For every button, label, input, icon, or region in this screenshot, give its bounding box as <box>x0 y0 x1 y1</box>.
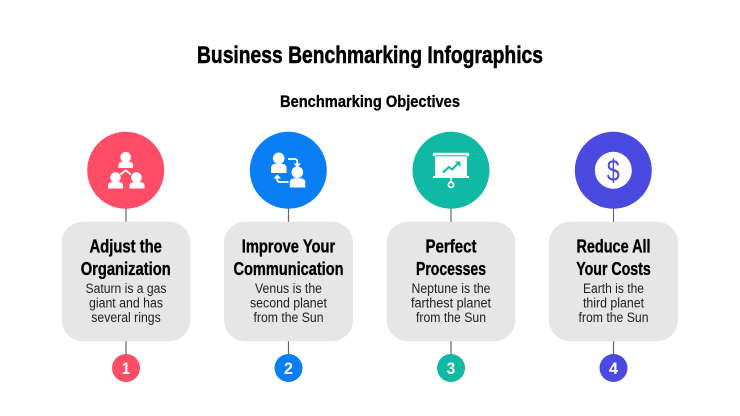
icon: red circle with people hierarchy <box>87 132 164 209</box>
card 1: Saturn is a gas <box>86 281 167 296</box>
card 4: Your Costs <box>576 258 651 279</box>
number badge 3 <box>437 354 465 382</box>
number badge 3: 3 <box>447 359 455 378</box>
number badge 4 <box>600 354 628 382</box>
panel: adjust the organization <box>62 132 190 382</box>
card 2: Venus is the <box>255 281 322 296</box>
card 2: Improve Your <box>242 235 335 256</box>
title: Business Benchmarking Infographics <box>197 42 543 69</box>
number badge 2 <box>274 354 302 382</box>
card 4: Reduce All <box>576 235 650 256</box>
card 4: Earth is the <box>583 281 644 296</box>
number badge 1: 1 <box>122 359 130 378</box>
card 1: Adjust the <box>89 235 162 256</box>
card 1 <box>62 222 190 341</box>
card 1: Organization <box>81 258 171 279</box>
icon: blue circle with people exchange <box>250 132 327 209</box>
card 2 <box>224 222 353 341</box>
card 4: from the Sun <box>578 310 648 325</box>
card 3: from the Sun <box>416 310 486 325</box>
card 1: giant and has <box>89 296 163 311</box>
card 2: from the Sun <box>254 310 324 325</box>
number badge 4: 4 <box>609 359 619 378</box>
panel: improve your communication <box>224 132 353 382</box>
card 3: Neptune is the <box>412 281 490 296</box>
card 3 <box>387 222 515 341</box>
card 2: Communication <box>234 258 344 279</box>
card 4: third planet <box>583 296 644 311</box>
number badge 2: 2 <box>284 359 293 378</box>
panel: perfect processes <box>387 132 515 382</box>
card 2: second planet <box>250 296 327 311</box>
icon: purple circle with dollar coin <box>575 132 652 209</box>
card 3: Perfect <box>426 235 476 256</box>
icon: green circle with presentation board <box>412 132 490 209</box>
icon: purple circle with dollar coin: $ <box>607 153 620 188</box>
panel: reduce all your costs <box>549 132 678 382</box>
card 3: farthest planet <box>411 296 491 311</box>
number badge 1 <box>112 354 140 382</box>
card 4 <box>549 222 678 341</box>
card 3: Processes <box>416 258 486 279</box>
subtitle: Benchmarking Objectives <box>280 92 460 111</box>
card 1: several rings <box>91 310 161 325</box>
